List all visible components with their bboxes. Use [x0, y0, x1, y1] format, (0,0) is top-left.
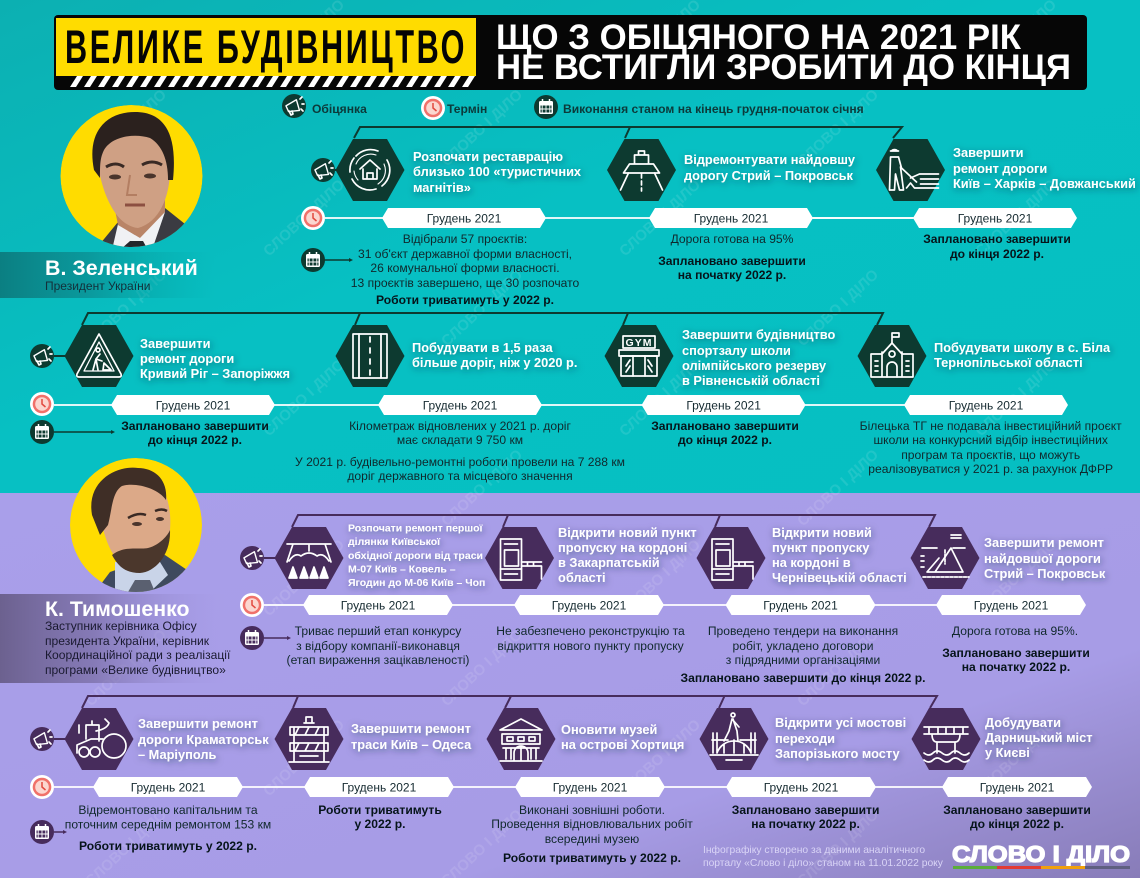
- promise: Kramatorsk - Mariupol road: [64, 708, 271, 853]
- promise: Zaporizhzhia bridge crossings: [700, 708, 906, 831]
- source credit: Інфографіку створено за даними аналітичного: [703, 844, 925, 856]
- promise: Khortytsia museum: на острові Хортиця: [561, 737, 684, 752]
- promise: Khortytsia museum: Роботи триватимуть у 2022 р.: [503, 851, 681, 865]
- promise: Stryi - Pokrovsk road: Грудень 2021: [694, 212, 769, 226]
- promise: Kramatorsk - Mariupol road: Роботи триватимуть у 2022 р.: [79, 839, 257, 853]
- promise: Kyiv - Kharkiv - Dovzhanskyi road: ремонт дороги: [953, 161, 1047, 176]
- promise: Darnytskyi bridge: Заплановано завершити: [943, 803, 1091, 817]
- promise: Stryi - Pokrovsk road, Tymoshenko: [910, 527, 1106, 674]
- text: СЛОВО І ДІЛО: [972, 716, 1060, 800]
- promise: Stryi - Pokrovsk road: дорогу Стрий – Покровськ: [684, 168, 853, 183]
- text: СЛОВО І ДІЛО: [972, 176, 1060, 260]
- promise: restoration of tourist magnets: 31 об'єкт державної форми власності,: [358, 247, 572, 261]
- promise: Kyiv bypass road: М-07 Київ – Ковель –: [348, 564, 456, 576]
- promise: Stryi - Pokrovsk road, Tymoshenko: Стрий – Покровськ: [984, 566, 1106, 581]
- promise: Kryvyi Rih - Zaporizhzhia road: [64, 325, 290, 447]
- promise: restoration of tourist magnets: Грудень 2021: [427, 212, 502, 226]
- promise: restoration of tourist magnets: Розпочати реставрацію: [413, 149, 563, 164]
- text: СЛОВО І ДІЛО: [794, 266, 882, 350]
- text: СЛОВО І ДІЛО: [438, 86, 526, 170]
- promise: Khortytsia museum: Проведення відновлювальних робіт: [491, 817, 693, 831]
- promise: Kyiv - Odesa road: Роботи триватимуть: [318, 803, 442, 817]
- promise: build 1.5 times more roads: має складати 9 750 км: [397, 433, 523, 447]
- promise: school in Bila: школи на конкурсний відбір інвестиційних: [873, 433, 1108, 447]
- promise: Kyiv bypass road: ділянки Київської: [348, 536, 441, 548]
- promise: Stryi - Pokrovsk road, Tymoshenko: Грудень 2021: [974, 598, 1049, 612]
- promise: Kryvyi Rih - Zaporizhzhia road: Заплановано завершити: [121, 419, 269, 433]
- promise: Stryi - Pokrovsk road, Tymoshenko: Завершити ремонт: [984, 535, 1104, 550]
- promise: Kyiv bypass road: Розпочати ремонт першої: [348, 522, 484, 534]
- promise: Darnytskyi bridge: Добудувати: [985, 715, 1061, 730]
- text: СЛОВО І ДІЛО: [438, 266, 526, 350]
- title: yellow plate: [56, 18, 476, 87]
- promise: Olympic school gym: Грудень 2021: [686, 398, 761, 412]
- text: СЛОВО І ДІЛО: [438, 446, 526, 530]
- promise: Darnytskyi bridge: [912, 708, 1092, 831]
- promise: checkpoint in Zakarpattia: Відкрити новий пункт: [558, 525, 697, 540]
- text: СЛОВО І ДІЛО: [260, 176, 348, 260]
- text: СЛОВО І ДІЛО: [616, 536, 704, 620]
- text: СЛОВО І ДІЛО: [794, 446, 882, 530]
- promise: Zaporizhzhia bridge crossings: Грудень 2021: [764, 780, 839, 794]
- promise: school in Bila: Білецька ТГ не подавала інвестиційний проєкт: [860, 419, 1122, 433]
- title banner: [54, 15, 1087, 90]
- promise: Kyiv bypass road: Ягодин до М-06 Київ – Чоп: [348, 577, 485, 589]
- text: СЛОВО І ДІЛО: [972, 356, 1060, 440]
- name band: Tymoshenko: президента України, керівник: [45, 634, 210, 648]
- promise: Kramatorsk - Mariupol road: дороги Краматорськ: [138, 732, 269, 747]
- text: СЛОВО І ДІЛО: [616, 716, 704, 800]
- text: СЛОВО І ДІЛО: [616, 176, 704, 260]
- promise: Kyiv - Kharkiv - Dovzhanskyi road: Заплановано завершити: [923, 232, 1071, 246]
- promise: Olympic school gym: спортзалу школи: [682, 343, 791, 358]
- name band: Zelensky: В. Зеленський: [45, 256, 198, 280]
- promise: Stryi - Pokrovsk road, Tymoshenko: Заплановано завершити: [942, 646, 1090, 660]
- promise: Olympic school gym: Заплановано завершити: [651, 419, 799, 433]
- promise: checkpoint in Chernivtsi: Відкрити новий: [772, 525, 872, 540]
- promise: checkpoint in Zakarpattia: [485, 525, 697, 653]
- row 3 bracket: [292, 515, 935, 527]
- promise: Stryi - Pokrovsk road, Tymoshenko: Дорога готова на 95%.: [952, 624, 1078, 638]
- promise: checkpoint in Chernivtsi: Заплановано завершити до кінця 2022 р.: [681, 671, 925, 685]
- title: subtitle: НЕ ВСТИГЛИ ЗРОБИТИ ДО КІНЦЯ: [496, 48, 1071, 87]
- promise: Kyiv - Odesa road: у 2022 р.: [354, 817, 406, 831]
- promise: Kyiv - Kharkiv - Dovzhanskyi road: до кінця 2022 р.: [950, 247, 1044, 261]
- text: СЛОВО І ДІЛО: [260, 356, 348, 440]
- promise: Khortytsia museum: Виконані зовнішні роботи.: [519, 803, 665, 817]
- promise: checkpoint in Zakarpattia: області: [558, 570, 606, 585]
- promise: Kyiv - Kharkiv - Dovzhanskyi road: Грудень 2021: [958, 212, 1033, 226]
- promise: Zaporizhzhia bridge crossings: Відкрити усі мостові: [775, 715, 906, 730]
- text: СЛОВО І ДІЛО: [616, 356, 704, 440]
- promise: build 1.5 times more roads: Грудень 2021: [423, 398, 498, 412]
- promise: Kramatorsk - Mariupol road: Відремонтовано капітальним та: [78, 803, 258, 817]
- promise: checkpoint in Chernivtsi: на кордоні в: [772, 555, 851, 570]
- legend: Обіцянка: [312, 102, 367, 116]
- promise: Zaporizhzhia bridge crossings: на початку 2022 р.: [751, 817, 860, 831]
- promise: checkpoint in Chernivtsi: Проведено тендери на виконання: [708, 624, 898, 638]
- name band: Zelensky: [0, 252, 215, 298]
- row 1 bracket: [354, 127, 902, 138]
- title: subtitle: ЩО З ОБІЦЯНОГО НА 2021 РІК: [496, 18, 1022, 57]
- promise: build 1.5 times more roads: доріг державного та місцевого значення: [347, 469, 573, 483]
- promise: Zaporizhzhia bridge crossings: Запорізького мосту: [775, 746, 901, 761]
- promise: Kyiv bypass road: Грудень 2021: [341, 598, 416, 612]
- title: subtitle: [496, 18, 1071, 87]
- legend: Термін: [447, 102, 487, 116]
- promise: restoration of tourist magnets: Роботи триватимуть у 2022 р.: [376, 293, 554, 307]
- source credit: порталу «Слово і діло» станом на 11.01.2022 року: [703, 858, 944, 869]
- promise: school in Bila: Грудень 2021: [949, 398, 1024, 412]
- promise: restoration of tourist magnets: 26 комунальної форми власності.: [370, 261, 560, 275]
- promise: Khortytsia museum: Грудень 2021: [553, 780, 628, 794]
- row 4 timeline: [30, 727, 1020, 844]
- promise: restoration of tourist magnets: Відібрали 57 проєктів:: [403, 232, 527, 246]
- promise: Khortytsia museum: всередині музею: [545, 832, 639, 846]
- promise: checkpoint in Chernivtsi: пункт пропуску: [772, 540, 870, 555]
- promise: checkpoint in Chernivtsi: Грудень 2021: [763, 598, 838, 612]
- promise: Kyiv - Odesa road: [274, 708, 472, 831]
- row 2 timeline: [30, 344, 990, 444]
- promise: checkpoint in Zakarpattia: відкриття нового пункту пропуску: [497, 639, 685, 653]
- portrait: Zelensky: [60, 105, 202, 250]
- promise: checkpoint in Zakarpattia: Грудень 2021: [552, 598, 627, 612]
- promise: Kyiv bypass road: (етап вираження зацікавленості): [287, 653, 469, 667]
- text: СЛОВО І ДІЛО: [972, 536, 1060, 620]
- logo: СЛОВО І ДІЛО: [952, 841, 1130, 867]
- promise: build 1.5 times more roads: У 2021 р. будівельно-ремонтні роботи провели на 7 288 км: [295, 455, 625, 469]
- promise: Kyiv - Odesa road: Грудень 2021: [342, 780, 417, 794]
- promise: school in Bila: Тернопільської області: [934, 355, 1083, 370]
- promise: Kyiv bypass road: з відбору компанії-виконавця: [296, 639, 460, 653]
- name band: Zelensky: Президент України: [45, 279, 150, 293]
- promise: Kyiv - Odesa road: траси Київ – Одеса: [351, 737, 472, 752]
- promise: Stryi - Pokrovsk road, Tymoshenko: на початку 2022 р.: [962, 660, 1070, 674]
- promise: checkpoint in Chernivtsi: з підрядними організаціями: [726, 653, 880, 667]
- name band: Tymoshenko: Координаційної ради з реалізації: [45, 648, 231, 662]
- promise: Olympic school gym: в Рівненській області: [682, 373, 820, 388]
- text: СЛОВО І ДІЛО: [794, 626, 882, 710]
- name band: Tymoshenko: програми «Велике будівництво»: [45, 663, 226, 677]
- promise: Darnytskyi bridge: у Києві: [985, 745, 1030, 760]
- text: СЛОВО І ДІЛО: [82, 266, 170, 350]
- text: СЛОВО І ДІЛО: [438, 626, 526, 710]
- portrait: Tymoshenko: [70, 458, 202, 592]
- promise: checkpoint in Chernivtsi: [681, 525, 925, 685]
- promise: build 1.5 times more roads: Кілометраж відновлених у 2021 р. доріг: [349, 419, 571, 433]
- text: СЛОВО І ДІЛО: [794, 86, 882, 170]
- promise: Darnytskyi bridge: Грудень 2021: [980, 780, 1055, 794]
- promise: Kyiv bypass road: обхідної дороги від траси: [348, 550, 483, 562]
- promise: Kyiv - Kharkiv - Dovzhanskyi road: Завершити: [953, 145, 1023, 160]
- promise: Zaporizhzhia bridge crossings: Заплановано завершити: [732, 803, 879, 817]
- promise: Darnytskyi bridge: до кінця 2022 р.: [970, 817, 1064, 831]
- promise: Kryvyi Rih - Zaporizhzhia road: Грудень 2021: [156, 398, 231, 412]
- promise: Stryi - Pokrovsk road, Tymoshenko: найдовшої дороги: [984, 551, 1101, 566]
- purple background panel: [0, 493, 1140, 878]
- promise: checkpoint in Zakarpattia: в Закарпатській: [558, 555, 660, 570]
- promise: Olympic school gym: [604, 325, 835, 447]
- promise: restoration of tourist magnets: [336, 139, 582, 307]
- promise: Khortytsia museum: Оновити музей: [561, 722, 657, 737]
- name band: Tymoshenko: [0, 594, 235, 683]
- row 3 timeline: [240, 546, 1010, 650]
- promise: Kryvyi Rih - Zaporizhzhia road: Завершити: [140, 336, 210, 351]
- text: СЛОВО І ДІЛО: [82, 626, 170, 710]
- title: yellow plate: ВЕЛИКЕ БУДІВНИЦТВО: [65, 20, 467, 73]
- promise: Kryvyi Rih - Zaporizhzhia road: Кривий Ріг – Запоріжжя: [140, 366, 290, 381]
- legend: Виконання станом на кінець грудня-початок січня: [563, 102, 864, 116]
- promise: school in Bila: Побудувати школу в с. Біла: [934, 340, 1111, 355]
- promise: Kyiv bypass road: Триває перший етап конкурсу: [295, 624, 462, 638]
- promise: checkpoint in Zakarpattia: пропуску на кордоні: [558, 540, 687, 555]
- promise: Olympic school gym: олімпійського резерву: [682, 358, 827, 373]
- promise: school in Bila: [858, 325, 1122, 476]
- name band: Tymoshenko: К. Тимошенко: [45, 597, 189, 621]
- promise: Stryi - Pokrovsk road: [607, 139, 856, 282]
- promise: Kyiv - Kharkiv - Dovzhanskyi road: [813, 139, 1136, 261]
- promise: Olympic school gym: Завершити будівництво: [682, 327, 835, 342]
- promise: Stryi - Pokrovsk road: Заплановано завершити: [658, 254, 806, 268]
- teal background panel: [0, 0, 1140, 493]
- promise: checkpoint in Chernivtsi: робіт, укладено договори: [733, 639, 873, 653]
- promise: Kryvyi Rih - Zaporizhzhia road: до кінця 2022 р.: [148, 433, 242, 447]
- promise: checkpoint in Zakarpattia: Не забезпечено реконструкцію та: [496, 624, 685, 638]
- promise: school in Bila: програм та проєктів, що можуть: [901, 448, 1080, 462]
- promise: build 1.5 times more roads: Побудувати в 1,5 раза: [412, 340, 553, 355]
- legend: [282, 94, 864, 120]
- promise: build 1.5 times more roads: [295, 325, 625, 483]
- promise: school in Bila: реалізовуватися у 2021 р. за рахунок ДФРР: [868, 462, 1113, 476]
- promise: Stryi - Pokrovsk road: на початку 2022 р.: [678, 268, 786, 282]
- promise: Olympic school gym: GYM: [626, 337, 652, 349]
- promise: checkpoint in Chernivtsi: Чернівецькій області: [772, 570, 907, 585]
- text: СЛОВО І ДІЛО: [82, 86, 170, 170]
- text: СЛОВО І ДІЛО: [260, 536, 348, 620]
- name band: Tymoshenko: Заступник керівника Офісу: [45, 619, 198, 633]
- promise: Darnytskyi bridge: Дарницький міст: [985, 730, 1092, 745]
- promise: Kyiv - Kharkiv - Dovzhanskyi road: Київ – Харків – Довжанський: [953, 176, 1136, 191]
- promise: Kramatorsk - Mariupol road: Завершити ремонт: [138, 716, 258, 731]
- row 4 bracket: [82, 696, 937, 708]
- promise: Khortytsia museum: [486, 708, 693, 865]
- promise: Kyiv - Odesa road: Завершити ремонт: [351, 721, 471, 736]
- promise: Olympic school gym: до кінця 2022 р.: [678, 433, 772, 447]
- promise: Kramatorsk - Mariupol road: Грудень 2021: [131, 780, 206, 794]
- promise: restoration of tourist magnets: магнітів»: [413, 180, 471, 195]
- promise: restoration of tourist magnets: близько 100 «туристичних: [413, 164, 582, 179]
- promise: Stryi - Pokrovsk road: Відремонтувати найдовшу: [684, 152, 856, 167]
- promise: restoration of tourist magnets: 13 проєктів завершено, ще 30 розпочато: [351, 276, 579, 290]
- promise: Stryi - Pokrovsk road: Дорога готова на 95%: [671, 232, 794, 246]
- promise: Kramatorsk - Mariupol road: – Маріуполь: [138, 747, 216, 762]
- promise: build 1.5 times more roads: більше доріг, ніж у 2020 р.: [412, 355, 577, 370]
- text: СЛОВО І ДІЛО: [260, 716, 348, 800]
- row 1 timeline: [301, 158, 1000, 272]
- promise: Kryvyi Rih - Zaporizhzhia road: ремонт дороги: [140, 351, 234, 366]
- promise: Kramatorsk - Mariupol road: поточним середнім ремонтом 153 км: [65, 818, 271, 832]
- promise: Zaporizhzhia bridge crossings: переходи: [775, 731, 835, 746]
- promise: Kyiv bypass road: [274, 522, 485, 667]
- row 2 bracket: [82, 313, 883, 325]
